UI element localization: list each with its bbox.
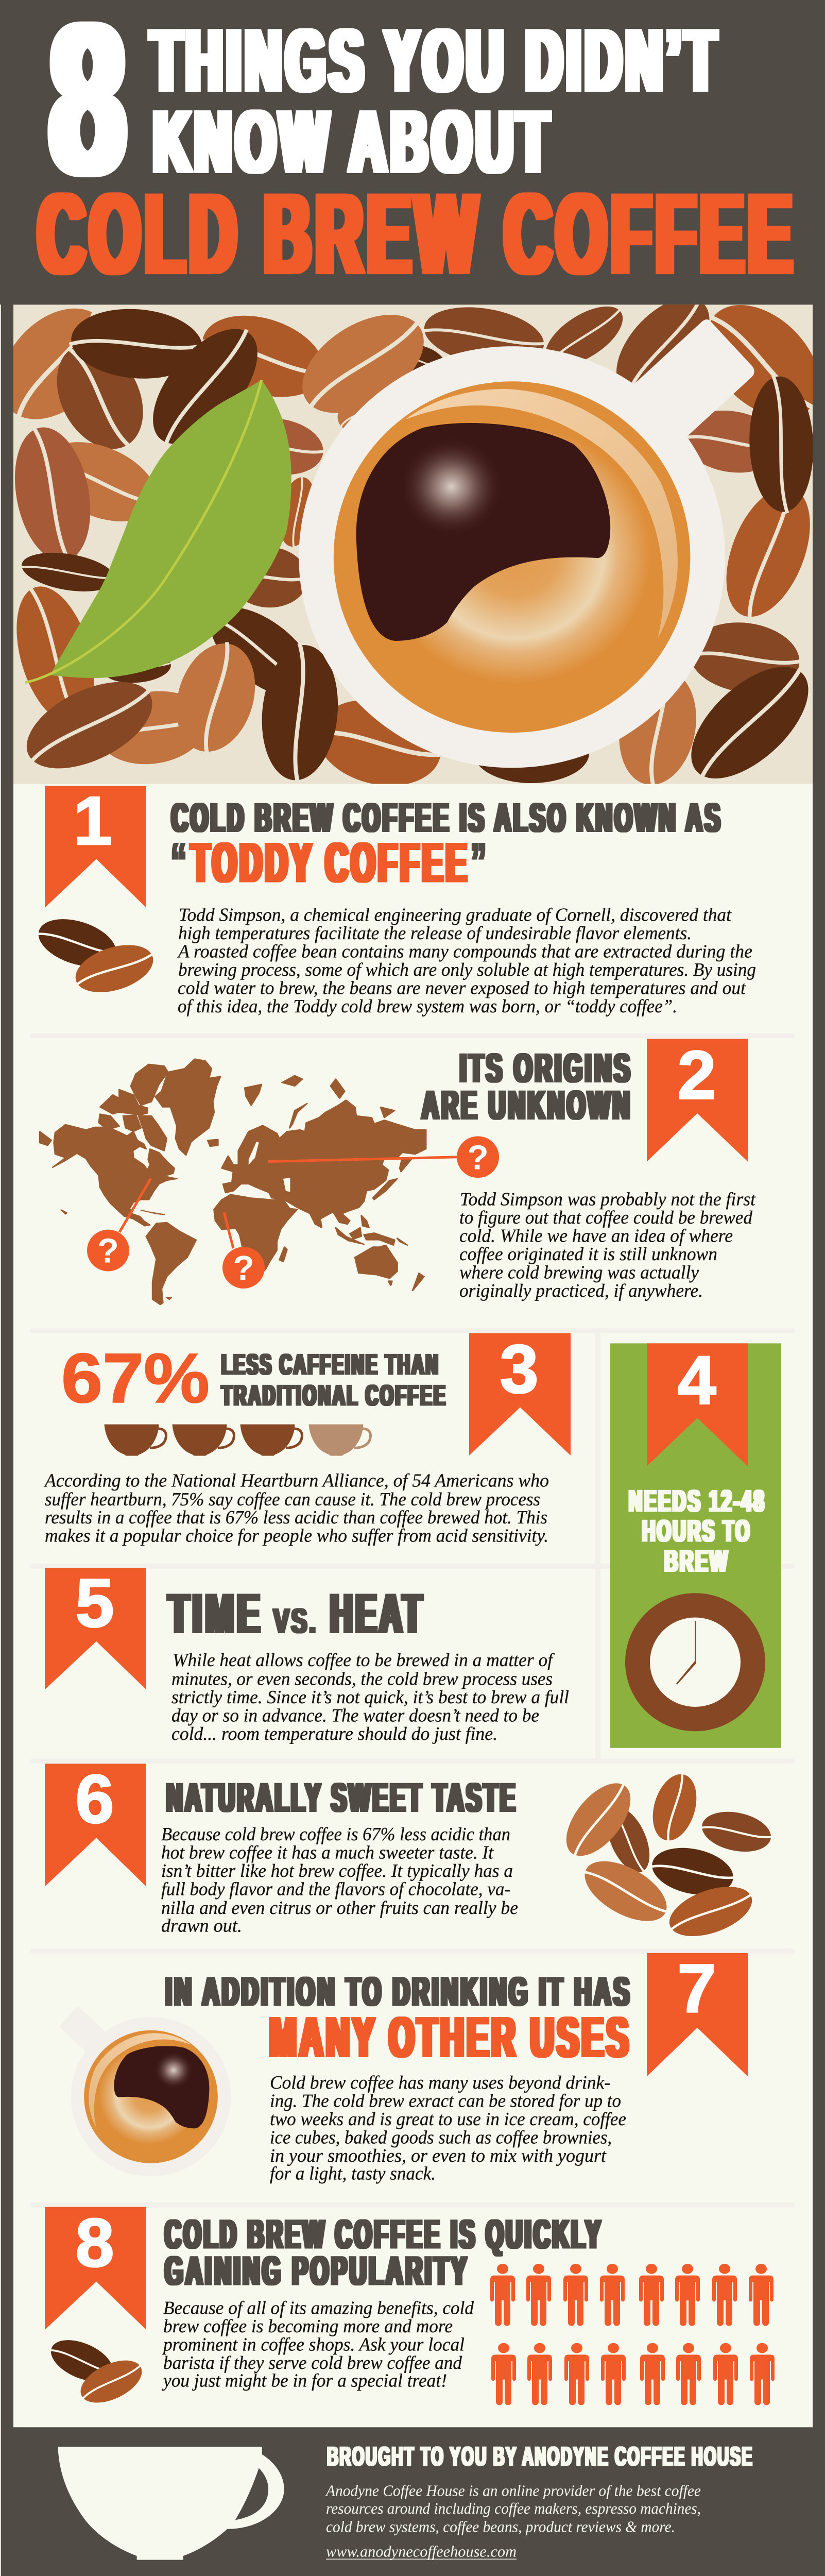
content panel background	[13, 784, 813, 2427]
panel: fact 2	[40, 1037, 757, 1304]
panel: fact 3	[43, 1331, 571, 1547]
question marker: Asia	[457, 1136, 499, 1178]
body text 8	[161, 2298, 474, 2391]
heading 3: LESS CAFFEINE THAN	[221, 1348, 440, 1381]
icon: clock	[625, 1593, 765, 1731]
question marker: Asia: ?	[467, 1138, 489, 1177]
ribbon 3	[469, 1331, 571, 1455]
icon: two coffee beans	[44, 2331, 149, 2412]
hero coffee beans	[0, 281, 825, 799]
body text 1	[177, 905, 756, 1017]
map marker lines	[119, 1157, 457, 1248]
ribbon 2: 2	[677, 1037, 716, 1113]
body text 2: to figure out that coffee could be brewed	[459, 1207, 752, 1228]
ribbon 1	[45, 783, 146, 908]
body text 5	[171, 1650, 569, 1744]
body text 6: isn’t bitter like hot brew coffee. It typically has a	[161, 1861, 513, 1882]
heading 5	[168, 1583, 425, 1645]
green leaf	[25, 380, 291, 683]
footer link: www.anodynecoffeehouse.com	[326, 2543, 517, 2560]
footer text	[325, 2482, 701, 2535]
question marker: Africa: ?	[233, 1249, 254, 1287]
body text 2: where cold brewing was actually	[459, 1262, 699, 1283]
footer text: resources around including coffee makers, espresso machines,	[326, 2499, 701, 2517]
heading 1: “	[170, 832, 187, 894]
body text 2: Todd Simpson was probably not the first	[460, 1189, 757, 1210]
panel: fact 1	[31, 783, 756, 1017]
heading 2: ITS ORIGINS	[460, 1045, 632, 1091]
body text 1: brewing process, some of which are only soluble at high temperatures. By using	[178, 959, 756, 980]
ribbon 1: 1	[73, 783, 112, 859]
ribbon 7	[647, 1950, 748, 2076]
small coffee cup	[60, 2007, 231, 2177]
heading 4: HOURS TO	[642, 1514, 751, 1548]
body text 7: ing. The cold brew exract can be stored for up to	[270, 2091, 621, 2111]
body text 6: Because cold brew coffee is 67% less acidic than	[161, 1824, 510, 1845]
body text 2: cold. While we have an idea of where	[459, 1226, 733, 1246]
heading 3: TRADITIONAL COFFEE	[221, 1379, 447, 1412]
panel: fact 8	[44, 2205, 775, 2412]
body text 3: suffer heartburn, 75% say coffee can cause it. The cold brew process	[45, 1489, 540, 1510]
panel: fact 5	[45, 1565, 569, 1744]
heading 1: TODDY COFFEE	[191, 832, 470, 894]
ribbon 4: 4	[677, 1342, 716, 1418]
body text 1: cold water to brew, the beans are never exposed to high temperatures and out	[178, 978, 747, 998]
footer	[58, 2442, 753, 2560]
footer text: Anodyne Coffee House is an online provider of the best coffee	[325, 2482, 701, 2499]
hero illustration: coffee cup, beans and leaf	[13, 304, 813, 784]
body text 8: you just might be in for a special treat!	[161, 2370, 447, 2391]
ribbon 5	[45, 1565, 146, 1689]
footer text: cold brew systems, coffee beans, product reviews & more.	[326, 2518, 675, 2535]
body text 6: hot brew coffee it has a much sweeter taste. It	[161, 1842, 494, 1863]
body text 5: While heat allows coffee to be brewed in a matter of	[173, 1650, 555, 1671]
body text 7: for a light, tasty snack.	[270, 2163, 436, 2184]
body text 5: day or so in advance. The water doesn’t need to be	[171, 1705, 539, 1726]
ribbon 5: 5	[75, 1565, 114, 1641]
body text 1: Todd Simpson, a chemical engineering graduate of Cornell, discovered that	[179, 905, 732, 925]
heading 2: ARE UNKNOWN	[422, 1082, 632, 1128]
body text 7: two weeks and is great to use in ice cream, coffee	[270, 2109, 626, 2130]
body text 3: According to the National Heartburn Alliance, of 54 Americans who	[43, 1470, 549, 1491]
icon row: four coffee cups	[105, 1425, 370, 1455]
ribbon 4	[647, 1342, 748, 1466]
body text 8: brew coffee is becoming more and more	[163, 2316, 453, 2337]
body text 7: ice cubes, baked goods such as coffee brownies,	[270, 2127, 612, 2148]
heading 5: TIME	[168, 1583, 263, 1645]
question marker: Americas: ?	[97, 1232, 119, 1270]
body text 3: makes it a popular choice for people who suffer from acid sensitivity.	[45, 1526, 548, 1547]
body text 7: Cold brew coffee has many uses beyond drink-	[270, 2072, 610, 2093]
body text 6: nilla and even citrus or other fruits can really be	[161, 1897, 518, 1919]
heading 1	[170, 795, 723, 894]
title	[38, 0, 797, 297]
body text 1: of this idea, the Toddy cold brew system was born, or “toddy coffee”.	[178, 996, 677, 1017]
ribbon 2	[647, 1037, 748, 1162]
ribbon 8: 8	[75, 2205, 114, 2281]
body text 6: full body flavor and the flavors of chocolate, va-	[161, 1879, 510, 1900]
icon: scattered coffee beans	[554, 1769, 776, 1946]
ribbon 6	[45, 1760, 146, 1887]
body text 5: minutes, or even seconds, the cold brew process uses	[171, 1669, 553, 1689]
body text 1: A roasted coffee bean contains many compounds that are extracted during the	[177, 941, 752, 962]
body text 7	[270, 2072, 626, 2184]
ribbon 8	[45, 2205, 146, 2330]
panel: fact 6	[45, 1760, 776, 1946]
icon: two coffee beans	[31, 910, 160, 1002]
panel: fact 4 (green)	[610, 1342, 781, 1748]
question marker: Africa	[222, 1247, 265, 1289]
body text 2	[459, 1189, 757, 1301]
ribbon 7: 7	[677, 1950, 716, 2027]
heading 4: BREW	[664, 1544, 729, 1578]
body text 2: coffee originated it is still unknown	[459, 1244, 717, 1265]
heading 8: GAINING POPULARITY	[165, 2248, 469, 2293]
heading 4	[629, 1484, 766, 1578]
body text 2: originally practiced, if anywhere.	[459, 1280, 703, 1301]
body text 5: cold... room temperature should do just fine.	[171, 1723, 497, 1744]
body text 6: drawn out.	[161, 1916, 242, 1936]
body text 8: barista if they serve cold brew coffee and	[163, 2352, 462, 2374]
body text 3	[43, 1470, 549, 1547]
body text 3: results in a coffee that is 67% less acidic than coffee brewed hot. This	[45, 1507, 547, 1528]
body text 1: high temperatures facilitate the release of undesirable flavor elements.	[178, 923, 692, 944]
large coffee cup seen from above	[299, 319, 754, 768]
67 percent statistic: 67%	[61, 1340, 210, 1417]
ribbon 6: 6	[75, 1760, 114, 1837]
panel: fact 7	[60, 1950, 748, 2184]
body text 8: prominent in coffee shops. Ask your local	[162, 2334, 465, 2355]
heading 2	[422, 1045, 632, 1128]
icon: large cup silhouette	[58, 2447, 284, 2560]
body text 7: in your smoothies, or even to mix with yogurt	[270, 2145, 607, 2166]
heading 5: VS.	[273, 1602, 318, 1640]
heading 3	[221, 1348, 447, 1412]
heading 7	[165, 1969, 632, 2069]
heading 6: NATURALLY SWEET TASTE	[166, 1775, 518, 1820]
heading 5: HEAT	[330, 1583, 425, 1645]
heading 1: ”	[470, 832, 487, 894]
pictogram: rows of people	[490, 2264, 775, 2405]
question marker: Americas	[87, 1230, 129, 1271]
body text 5: strictly time. Since it’s not quick, it’s best to brew a full	[171, 1687, 569, 1708]
world map	[40, 1059, 426, 1304]
body text 8: Because of all of its amazing benefits, cold	[163, 2298, 474, 2318]
body text 6	[161, 1824, 518, 1936]
heading 8	[165, 2211, 603, 2293]
ribbon 3: 3	[500, 1331, 539, 1408]
